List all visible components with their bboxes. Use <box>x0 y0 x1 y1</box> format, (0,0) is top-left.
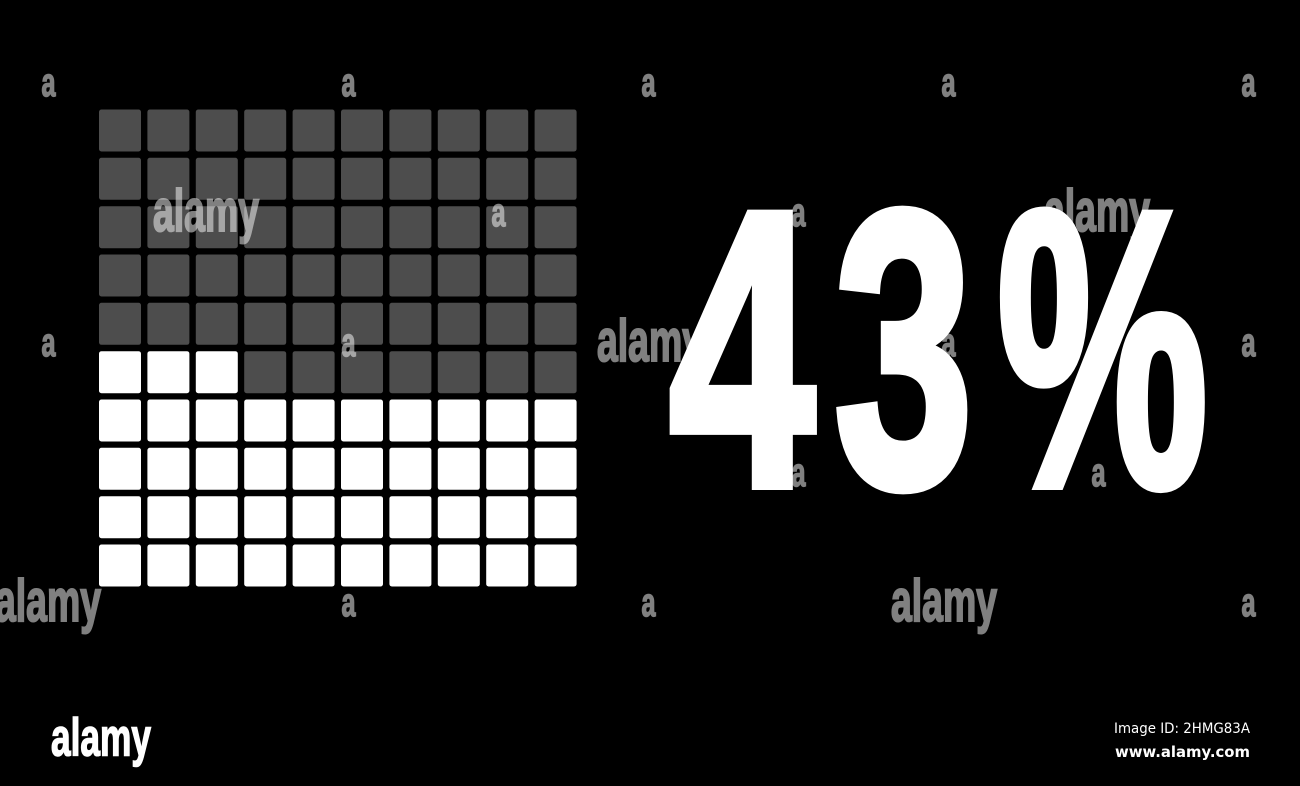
watermarks: a <box>792 191 806 235</box>
watermarks: a <box>642 581 656 625</box>
watermarks: alamy <box>0 568 101 634</box>
watermarks: a <box>942 321 956 365</box>
percentage value <box>669 129 1208 569</box>
watermarks: a <box>342 581 356 625</box>
percentage value: 3 <box>834 130 973 568</box>
watermarks: a <box>42 321 56 365</box>
watermarks: alamy <box>597 308 703 374</box>
watermarks: a <box>942 61 956 105</box>
watermarks: alamy <box>891 568 997 634</box>
watermarks: a <box>1242 61 1256 105</box>
alamy logo: alamy <box>51 708 151 768</box>
website url: www.alamy.com <box>1115 743 1250 761</box>
watermarks: a <box>1242 321 1256 365</box>
watermarks <box>0 61 1256 634</box>
watermarks: a <box>642 61 656 105</box>
percentage value: 4 <box>669 129 817 568</box>
waffle chart: remaining 57 cells <box>99 110 577 393</box>
image id: Image ID: 2HMG83A <box>1114 721 1250 737</box>
waffle chart: filled 43 cells <box>99 351 577 586</box>
watermarks: alamy <box>153 178 259 244</box>
watermarks: a <box>492 191 506 235</box>
percentage value: % <box>997 129 1208 569</box>
watermarks: a <box>792 451 806 495</box>
watermarks: alamy <box>1044 178 1150 244</box>
watermarks: a <box>42 61 56 105</box>
watermarks: a <box>342 61 356 105</box>
watermarks: a <box>1092 451 1106 495</box>
watermarks: a <box>1242 581 1256 625</box>
watermarks: a <box>342 321 356 365</box>
